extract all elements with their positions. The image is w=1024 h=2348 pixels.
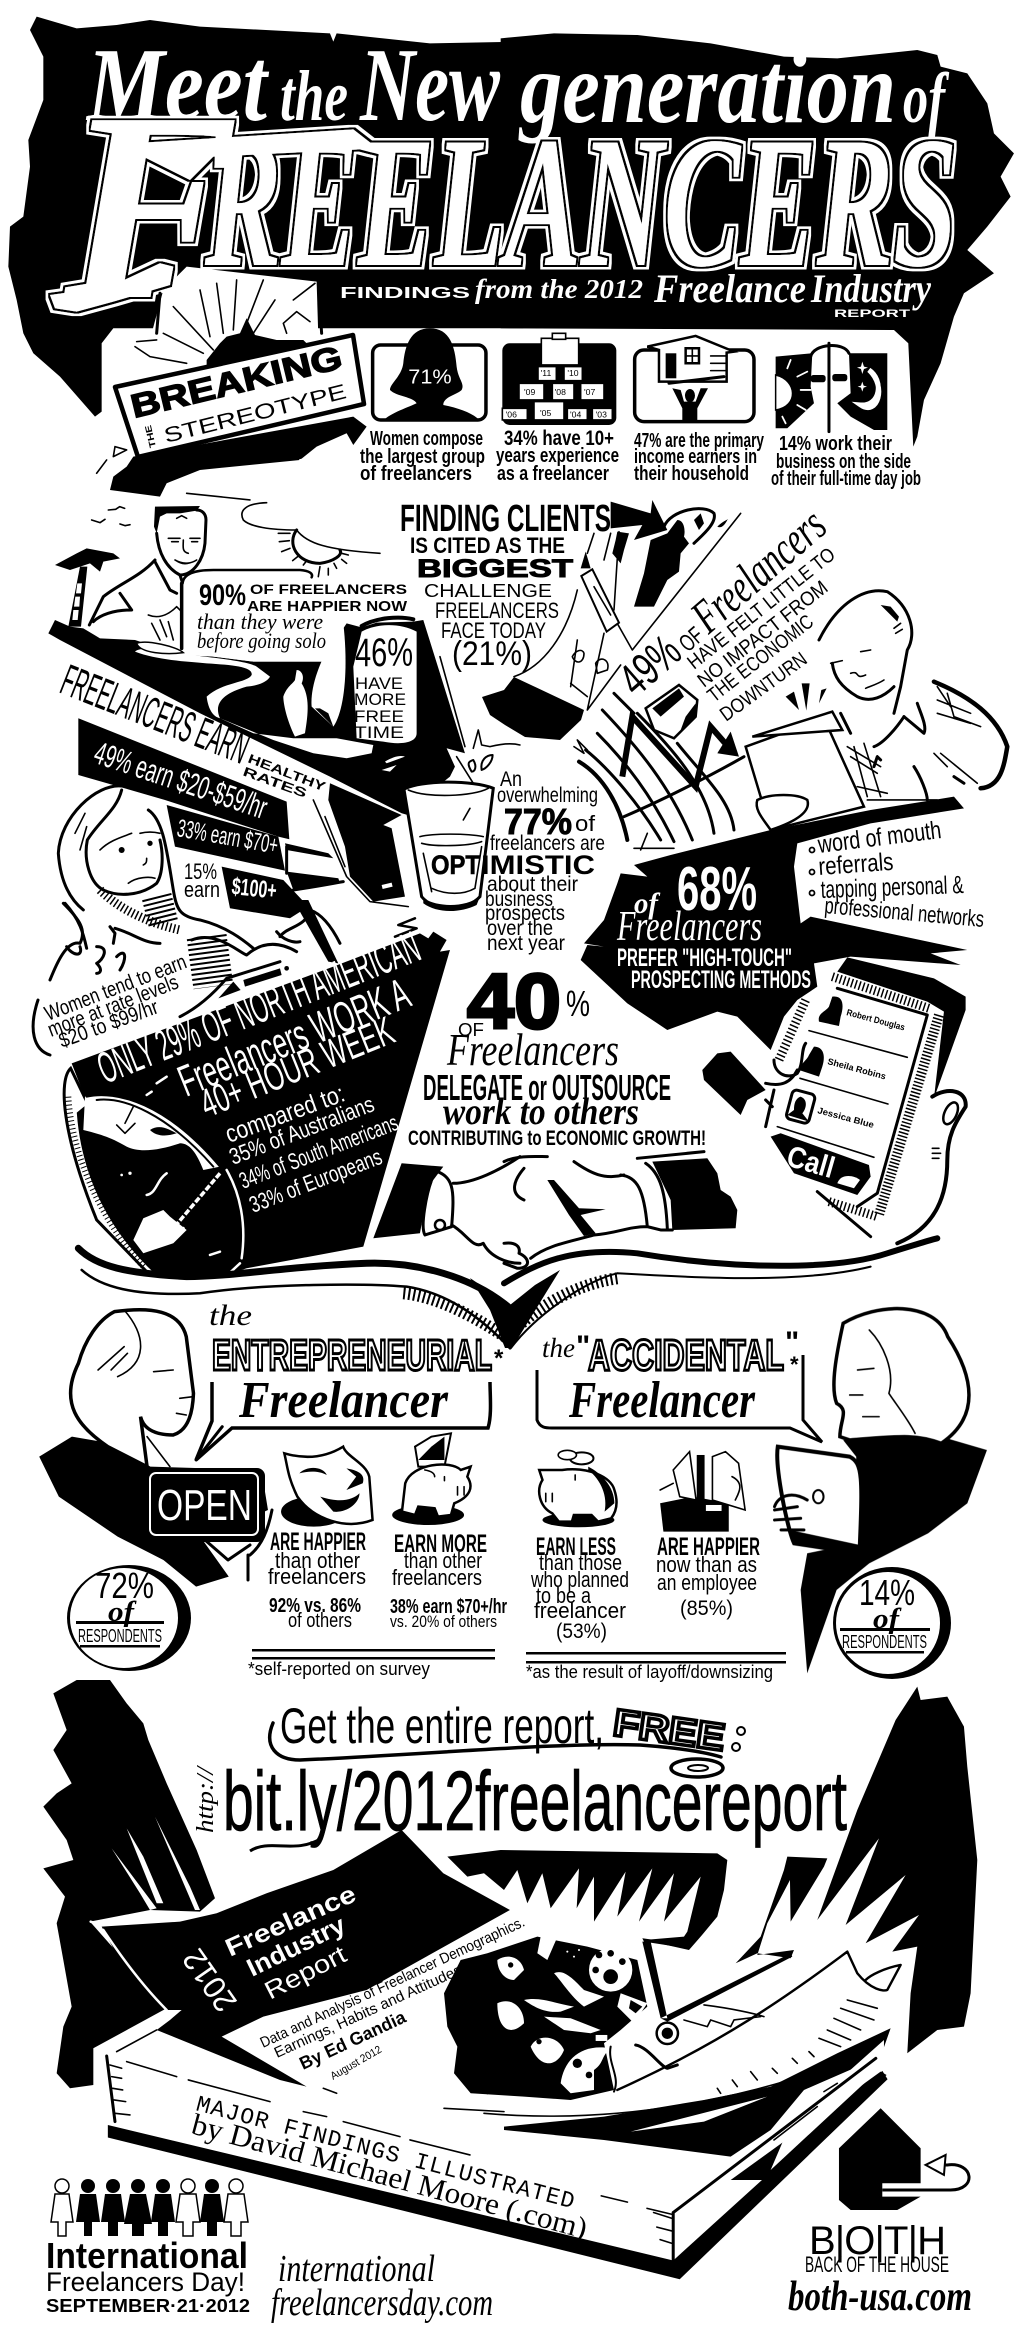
icon: woman silhouette: 71% bbox=[408, 365, 452, 388]
column: earn more: EARN MORE bbox=[394, 1530, 487, 1558]
title line: New bbox=[359, 26, 501, 143]
icon: stacked years: '10 bbox=[567, 368, 579, 378]
icon: stacked years: '04 bbox=[570, 409, 581, 419]
quote marks and asterisk: * bbox=[790, 1352, 799, 1377]
text: 90 percent happier: OF FREELANCERS bbox=[250, 581, 407, 597]
text: 46 percent more free time: HAVE bbox=[355, 674, 403, 693]
icon: stacked years: '08 bbox=[555, 387, 566, 397]
text: overwhelming 77 percent: of bbox=[575, 811, 596, 836]
text: overwhelming 77 percent: prospects bbox=[485, 902, 565, 925]
column: earn more: 38% earn $70+/hr bbox=[390, 1596, 507, 1618]
quote marks and asterisk: " bbox=[576, 1330, 590, 1363]
text: finding clients: IS CITED AS THE bbox=[410, 533, 565, 558]
header panel bbox=[8, 17, 1014, 447]
text: only 29 percent: ONLY 29% OF NORTH AMERICAN bbox=[91, 922, 427, 1093]
icon: stacked years bbox=[502, 333, 616, 425]
contact 3: Jessica Blue bbox=[816, 1105, 875, 1130]
caption 3 bbox=[634, 430, 765, 485]
badge: 72 percent: RESPONDENTS bbox=[78, 1626, 162, 1646]
text: finding clients: FREELANCERS bbox=[435, 598, 559, 623]
column: are happier: (85%) bbox=[680, 1597, 733, 1620]
cover title: 2012 bbox=[175, 1942, 244, 2019]
text: 90 percent happier: than they were bbox=[197, 609, 323, 634]
badge: 72 percent bbox=[67, 1565, 191, 1671]
badge: 14 percent: of bbox=[873, 1604, 902, 1635]
badge: 14 percent bbox=[833, 1567, 951, 1679]
cover subtitle: Earnings, Habits and Attitudes bbox=[272, 1962, 464, 2062]
column: are happier: freelancers bbox=[268, 1564, 366, 1589]
book body left bbox=[91, 1830, 510, 2155]
icon: stacked years: '09 bbox=[524, 387, 535, 397]
column: are happier: ARE HAPPIER bbox=[657, 1533, 760, 1561]
text: of: OF bbox=[458, 1020, 484, 1040]
text: overwhelming 77 percent: over the bbox=[487, 917, 553, 940]
black ink header background bbox=[8, 17, 1014, 447]
column: are happier: now than as bbox=[656, 1552, 757, 1577]
text: overwhelming 77 percent: IMISTIC bbox=[481, 850, 595, 880]
text: south americans: 34% of South Americans bbox=[235, 1109, 402, 1194]
flourish bbox=[250, 1838, 322, 1851]
list of methods bbox=[810, 816, 985, 932]
icon: piggy bank earn more bbox=[392, 1433, 471, 1525]
column: are happier bbox=[656, 1533, 760, 1620]
text: website: both-usa.com bbox=[788, 2274, 972, 2320]
caption 1: of freelancers bbox=[360, 463, 472, 485]
text: downturn detail: THE ECONOMIC bbox=[704, 611, 818, 707]
icon: house bbox=[839, 2108, 969, 2210]
sign text: breaking: BREAKING bbox=[127, 338, 346, 425]
text: australians: 35% of Australians bbox=[225, 1091, 378, 1170]
sign bbox=[115, 335, 364, 457]
text: downturn detail bbox=[683, 544, 840, 726]
icon: house on shoulders bbox=[635, 336, 754, 422]
black background and globe bbox=[64, 932, 450, 1275]
cover subtitle: August 2012 bbox=[328, 2044, 384, 2083]
text: freelancer: Freelancer bbox=[568, 1372, 756, 1429]
cover title: Industry bbox=[242, 1911, 350, 1982]
column: earn less: EARN LESS bbox=[536, 1533, 616, 1561]
flourish bbox=[270, 1723, 745, 1777]
icon: stacked years: '11 bbox=[541, 368, 551, 378]
caption 1 bbox=[360, 428, 485, 485]
illustration: phone and hand bbox=[702, 957, 966, 1243]
text: overwhelming 77 percent: overwhelming bbox=[497, 784, 598, 807]
text: freelancers day: Freelancers Day! bbox=[46, 2267, 245, 2297]
column: earn less: to be a bbox=[536, 1583, 592, 1608]
bars and monitor bbox=[78, 718, 408, 918]
text: prospecting methods: PROSPECTING METHODS bbox=[631, 966, 811, 994]
book body right bbox=[444, 1938, 901, 2180]
text: overwhelming 77 percent: next year bbox=[487, 932, 565, 955]
number: 68% bbox=[677, 855, 757, 924]
icon: day and night bbox=[776, 343, 887, 432]
text: freelancers: Freelancers bbox=[616, 904, 762, 950]
text: 49 percent of freelancers: 49% OF Freelancers bbox=[608, 498, 836, 706]
spine text: illustrator credit: by David Michael Moore (.com) bbox=[188, 2108, 591, 2245]
panel: happier and free time bbox=[48, 503, 465, 817]
icon: open sign bbox=[144, 1468, 272, 1580]
panel: freelancers earn healthy rates: FREELANCERS EARN bbox=[54, 656, 256, 774]
text: both: B|O|T|H bbox=[809, 2219, 946, 2263]
column: are happier: of others bbox=[288, 1610, 352, 1632]
text: downturn detail: HAVE FELT LITTLE TO bbox=[683, 544, 840, 674]
text: http: http:// bbox=[193, 1764, 219, 1833]
title line: generation bbox=[518, 32, 896, 145]
column: earn less: freelancer bbox=[534, 1598, 626, 1623]
column: are happier: ARE HAPPIER bbox=[270, 1528, 366, 1556]
caption: women rate levels: $20 to $99/hr bbox=[56, 996, 161, 1053]
list of methods: tapping personal & bbox=[820, 871, 964, 904]
panel: breaking the stereotype bbox=[97, 280, 921, 500]
icon: glass bbox=[404, 657, 520, 911]
heading: rates: RATES bbox=[241, 764, 310, 801]
caption 4 bbox=[771, 433, 921, 490]
sign text: stereotype: STEREOTYPE bbox=[162, 380, 349, 448]
text: overwhelming 77 percent bbox=[481, 768, 605, 955]
caption 4: business on the side bbox=[776, 451, 911, 473]
text: opt: OPT bbox=[431, 850, 480, 880]
title: Freelancers bbox=[50, 57, 957, 356]
column: earn more bbox=[390, 1530, 507, 1631]
column: earn less: (53%) bbox=[556, 1620, 607, 1643]
column: are happier: an employee bbox=[657, 1570, 757, 1595]
panel: optimistic glass bbox=[404, 657, 605, 955]
illustration: black tail bbox=[482, 677, 584, 740]
caption 4: of their full-time day job bbox=[771, 468, 921, 490]
icon: stacked years: '05 bbox=[540, 408, 551, 418]
title line bbox=[85, 26, 949, 145]
column: earn more: than other bbox=[404, 1548, 482, 1573]
illustration: handshake bbox=[373, 1152, 737, 1268]
icon: woman silhouette bbox=[373, 328, 486, 421]
text: date: SEPTEMBER·21·2012 bbox=[46, 2296, 250, 2316]
icon: open sign: OPEN bbox=[157, 1481, 252, 1530]
bar label: earn: earn bbox=[184, 877, 220, 902]
heading: healthy: HEALTHY bbox=[246, 751, 328, 794]
speech bubble bbox=[196, 1382, 490, 1460]
text: compared to: compared to: bbox=[221, 1080, 349, 1149]
heading: ACCIDENTAL bbox=[588, 1331, 784, 1380]
illustration: woman bbox=[50, 786, 417, 1017]
text: work to others: work to others bbox=[443, 1091, 639, 1133]
column: are happier: 92% vs. 86% bbox=[269, 1595, 361, 1617]
illustration: arrow and tools bbox=[514, 500, 741, 710]
bar label: 33 percent: 33% earn $70+ bbox=[175, 814, 280, 860]
text: free: FREE bbox=[611, 1702, 728, 1759]
panel: finding clients bbox=[400, 498, 741, 740]
icon: stacked years: '03 bbox=[596, 409, 607, 419]
column: earn less: than those bbox=[539, 1550, 622, 1575]
bar label: 49 percent: 49% earn $20-$59/hr bbox=[90, 734, 272, 826]
column: earn less: who planned bbox=[530, 1567, 629, 1592]
panel: economic downturn bbox=[574, 498, 1007, 850]
illustration: accidental woman with tablet bbox=[775, 1309, 987, 1673]
cover title: Report bbox=[260, 1940, 351, 2005]
cover title: Freelance bbox=[221, 1880, 360, 1962]
text: contributing: CONTRIBUTING to ECONOMIC GROWTH! bbox=[408, 1127, 706, 1150]
icon: stacked years: '06 bbox=[506, 409, 517, 419]
panel: accidental freelancer bbox=[526, 1309, 987, 1682]
text: finding clients: FINDING CLIENTS bbox=[400, 498, 611, 540]
number: 40 bbox=[467, 957, 561, 1045]
text: 40 hour week: 40+ HOUR WEEK bbox=[194, 1009, 401, 1126]
panel: report book bbox=[91, 1830, 901, 2279]
text: 46 percent more free time: 46% bbox=[355, 631, 413, 675]
text: international: International bbox=[46, 2235, 248, 2276]
subtitle: FINDINGS bbox=[340, 285, 471, 302]
text: 46 percent more free time: TIME bbox=[354, 723, 404, 742]
text: of: of bbox=[634, 887, 661, 920]
text: 90 percent happier bbox=[197, 579, 408, 653]
subtitle bbox=[340, 266, 931, 311]
caption: women rate levels bbox=[33, 950, 190, 1055]
column: are happier bbox=[268, 1528, 366, 1632]
text: finding clients: (21%) bbox=[452, 635, 532, 673]
text: overwhelming 77 percent: 77% bbox=[504, 801, 572, 842]
panel: back of the house logo bbox=[788, 2108, 972, 2320]
text: freelancers: Freelancers bbox=[446, 1024, 619, 1075]
caption 2 bbox=[496, 427, 619, 485]
caption 2: as a freelancer bbox=[497, 463, 609, 485]
text: the: the bbox=[542, 1333, 575, 1363]
text: delegate or outsource: DELEGATE or OUTSOURCE bbox=[423, 1067, 671, 1108]
icon: row of people bbox=[51, 2179, 248, 2236]
contact 2: Sheila Robins bbox=[826, 1056, 887, 1081]
asterisk: * bbox=[494, 1345, 504, 1372]
text: overwhelming 77 percent: business bbox=[485, 888, 553, 911]
heading: ENTREPRENEURIAL bbox=[212, 1331, 492, 1380]
illustration: man at beach with land and sea bbox=[48, 503, 465, 817]
footnote: *as the result of layoff/downsizing bbox=[526, 1662, 773, 1682]
text: prefer high touch: PREFER "HIGH-TOUCH" bbox=[617, 944, 792, 972]
call button text: Call bbox=[783, 1140, 838, 1185]
badge: 14 percent: 14% bbox=[859, 1572, 915, 1613]
caption 1: the largest group bbox=[360, 446, 485, 468]
footnote: *self-reported on survey bbox=[248, 1659, 430, 1679]
text: get the report: Get the entire report, bbox=[280, 1698, 604, 1754]
text: downturn detail: DOWNTURN bbox=[716, 648, 811, 726]
column: are happier: than other bbox=[275, 1548, 360, 1573]
text: finding clients: FACE TODAY bbox=[441, 618, 546, 643]
cover title bbox=[175, 1880, 360, 2019]
text: overwhelming 77 percent: freelancers are bbox=[490, 832, 605, 855]
text: freelancer: Freelancer bbox=[238, 1372, 449, 1429]
text: 90 percent happier: 90% bbox=[199, 579, 246, 612]
column: earn more: freelancers bbox=[392, 1565, 482, 1590]
text: website line 2: freelancersday.com bbox=[271, 2282, 493, 2324]
list of methods: referrals bbox=[817, 848, 894, 881]
panel: entrepreneurial freelancer bbox=[39, 1299, 507, 1679]
caption 3: their household bbox=[634, 463, 749, 485]
black background bbox=[581, 797, 967, 1050]
caption: women rate levels: more at rate levels bbox=[45, 971, 182, 1042]
text: overwhelming 77 percent: An bbox=[500, 768, 522, 791]
column: earn less bbox=[530, 1533, 629, 1643]
text: 46 percent more free time bbox=[354, 631, 413, 742]
caption 2: years experience bbox=[496, 445, 619, 467]
cover subtitle: Data and Analysis of Freelancer Demographics. bbox=[258, 1914, 528, 2052]
percent sign: % bbox=[566, 983, 590, 1024]
text: work a: Freelancers WORK A bbox=[171, 969, 417, 1106]
title line: the bbox=[280, 56, 348, 136]
contact 1: Robert Douglas bbox=[845, 1007, 906, 1032]
badge: 72 percent: of bbox=[108, 1597, 137, 1628]
subtitle: report: REPORT bbox=[834, 308, 910, 320]
text: europeans: 33% of Europeans bbox=[245, 1143, 385, 1218]
icon: broken glass bbox=[97, 280, 367, 500]
quote marks and asterisk: " bbox=[785, 1326, 799, 1359]
subtitle: from the 2012 bbox=[475, 274, 643, 304]
bar label: 100 dollars: $100+ bbox=[230, 873, 278, 905]
text: 46 percent more free time: MORE bbox=[354, 690, 406, 709]
panel: 40 hour week bbox=[64, 922, 450, 1275]
text: the: the bbox=[209, 1299, 252, 1332]
badge: 14 percent: RESPONDENTS bbox=[842, 1632, 927, 1652]
panel: freelancers earn healthy rates bbox=[33, 656, 417, 1055]
panel: international freelancers day bbox=[46, 2179, 493, 2324]
caption: women rate levels: Women tend to earn bbox=[42, 950, 190, 1026]
bar label: 15 percent: 15% bbox=[184, 859, 217, 884]
text: 90 percent happier: before going solo bbox=[197, 628, 326, 653]
title line: of bbox=[903, 58, 949, 138]
speech bubble bbox=[537, 1355, 822, 1442]
cover subtitle: By Ed Gandia bbox=[296, 2006, 410, 2074]
illustration: chart and man bbox=[574, 591, 1007, 850]
illustration: entrepreneur woman bbox=[39, 1310, 268, 1587]
column: earn more: vs. 20% of others bbox=[390, 1612, 497, 1631]
spine text: major findings: MAJOR FINDINGS ILLUSTRATED bbox=[193, 2092, 577, 2215]
panel: 40 percent delegate bbox=[78, 957, 937, 1348]
text: 90 percent happier: ARE HAPPIER NOW bbox=[247, 598, 408, 615]
ink fans and teeth bbox=[43, 1680, 977, 2088]
text: overwhelming 77 percent: about their bbox=[487, 873, 578, 896]
caption 1: Women compose bbox=[370, 428, 483, 450]
panel: 68 percent prospecting bbox=[581, 797, 985, 1243]
subtitle: Freelance bbox=[653, 266, 806, 311]
title: Freelancers: F bbox=[60, 57, 239, 356]
text: finding clients bbox=[400, 498, 611, 673]
panel: get the report bbox=[43, 1680, 977, 2088]
text: finding clients: BIGGEST bbox=[417, 555, 573, 583]
sign text: the: THE bbox=[143, 424, 158, 449]
title line: Meet bbox=[85, 26, 269, 143]
caption 4: 14% work their bbox=[779, 433, 892, 455]
subtitle: Industry bbox=[810, 266, 931, 311]
text: website line 1: international bbox=[278, 2248, 435, 2290]
illustration: open book swoosh bbox=[78, 1238, 937, 1348]
caption 3: 47% are the primary bbox=[634, 430, 765, 452]
list of methods: word of mouth bbox=[816, 816, 943, 859]
badge: 72 percent: 72% bbox=[95, 1565, 154, 1606]
text: downturn detail: NO IMPACT FROM bbox=[694, 577, 832, 692]
book bottom edge bbox=[108, 2058, 888, 2279]
quote marks and asterisk bbox=[576, 1326, 799, 1377]
caption 3: income earners in bbox=[634, 446, 757, 468]
icon: stacked years: '07 bbox=[584, 387, 595, 397]
icon: suit and briefcase bbox=[660, 1452, 745, 1532]
text: 46 percent more free time: FREE bbox=[354, 707, 404, 726]
collage of doodles bbox=[444, 1933, 647, 2100]
icon: happy mask bbox=[281, 1447, 373, 1527]
icon: piggy bank earn less bbox=[539, 1450, 617, 1527]
caption 2: 34% have 10+ bbox=[504, 427, 614, 450]
text: finding clients: CHALLENGE bbox=[424, 581, 552, 601]
